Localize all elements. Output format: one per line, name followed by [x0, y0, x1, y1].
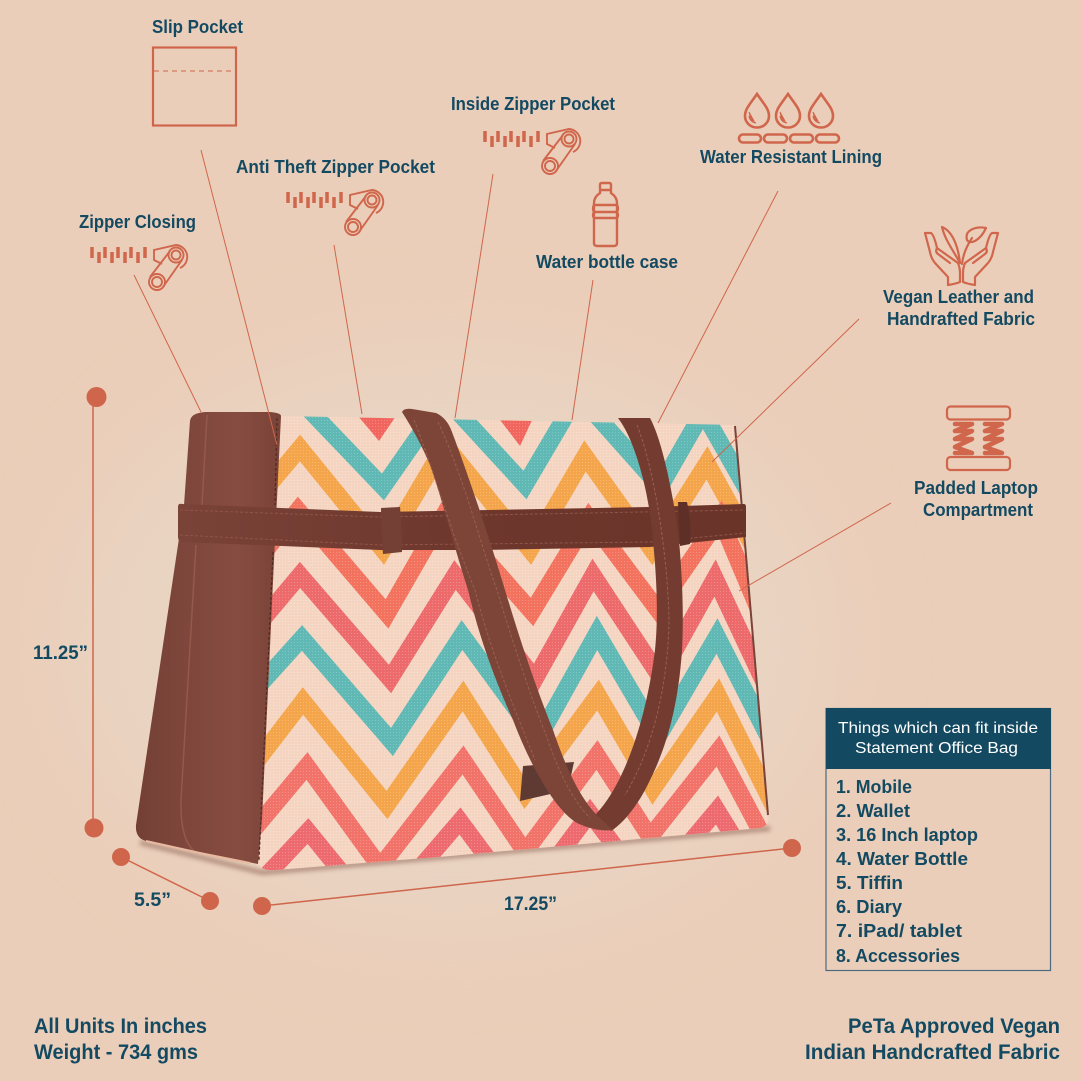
belt loop left — [381, 507, 402, 554]
heading: water resistant lining: Water Resistant Lining — [700, 147, 882, 167]
item list: 6. Diary — [836, 897, 902, 917]
text: padded laptop compartment: Compartment — [923, 500, 1033, 520]
item list: 3. 16 Inch laptop — [836, 825, 978, 845]
item list: 1. Mobile — [836, 777, 912, 797]
text: vegan leather: Handrafted Fabric — [887, 309, 1035, 329]
label: depth: 5.5” — [134, 890, 171, 911]
panel header — [826, 708, 1051, 769]
left strap — [402, 409, 613, 830]
text: padded laptop compartment — [914, 478, 1038, 520]
icon: water bottle — [593, 183, 618, 246]
label: width: 17.25” — [504, 894, 557, 915]
bag ground shadow — [140, 826, 770, 875]
heading: zipper closing: Zipper Closing — [79, 212, 196, 232]
footer right: Indian Handcrafted Fabric — [805, 1041, 1060, 1064]
heading: slip pocket: Slip Pocket — [152, 17, 243, 37]
heading: anti theft zipper pocket: Anti Theft Zipper Pocket — [236, 157, 435, 177]
right strap — [595, 418, 683, 831]
item list: 8. Accessories — [836, 946, 960, 966]
leather side panel — [136, 412, 281, 864]
footer left: Weight - 734 gms — [34, 1041, 198, 1064]
bag illustration — [136, 395, 780, 885]
belt loop right — [678, 502, 691, 546]
heading: inside zipper pocket: Inside Zipper Pocket — [451, 94, 615, 114]
panel: things which fit inside — [826, 708, 1051, 970]
label: height: 11.25” — [33, 643, 88, 664]
footer right — [805, 1015, 1060, 1064]
heading: water bottle case: Water bottle case — [536, 252, 678, 272]
footer right: PeTa Approved Vegan — [848, 1015, 1060, 1038]
text: vegan leather: Vegan Leather and — [883, 287, 1034, 307]
icon: hands with plant — [925, 227, 998, 285]
logo tag — [520, 762, 574, 801]
icon: anti theft zipper — [288, 190, 383, 235]
icon: slip pocket — [153, 48, 236, 126]
item list: 4. Water Bottle — [836, 849, 968, 869]
icon: water drops — [739, 94, 839, 142]
front panel right edge — [735, 426, 768, 815]
footer left: All Units In inches — [34, 1015, 207, 1038]
front fabric panel — [258, 416, 768, 870]
item list — [836, 777, 978, 966]
item list: 5. Tiffin — [836, 873, 903, 893]
footer left — [34, 1015, 207, 1064]
panel header: Statement Office Bag — [855, 740, 1018, 757]
text: vegan leather — [883, 287, 1035, 329]
panel header: Things which can fit inside — [838, 720, 1038, 737]
dimension: width — [253, 839, 801, 915]
icon: laptop padding spring — [947, 406, 1010, 470]
item list: 2. Wallet — [836, 801, 910, 821]
icon: inside zipper — [485, 129, 580, 174]
connector lines — [134, 150, 891, 591]
icon: closing zipper — [92, 245, 187, 290]
dimension: depth — [112, 848, 219, 910]
item list: 7. iPad/ tablet — [836, 921, 962, 941]
text: padded laptop compartment: Padded Laptop — [914, 478, 1038, 498]
belt — [178, 504, 746, 550]
dimension: height — [84, 387, 106, 838]
